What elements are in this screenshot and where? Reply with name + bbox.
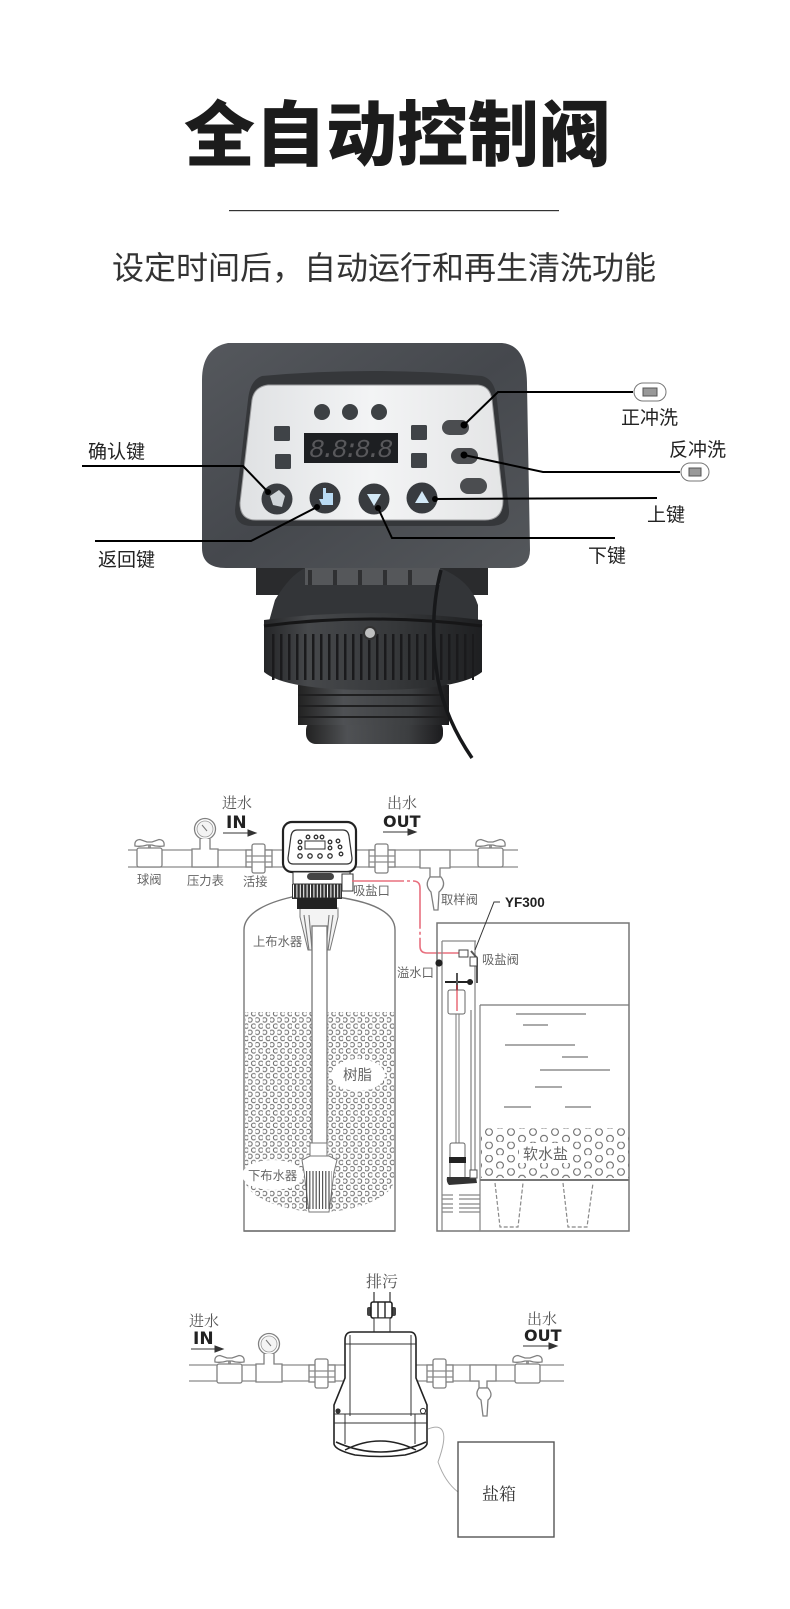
YF300 leader [475,902,500,950]
labels [189,1273,562,1504]
callout: back key [95,504,320,571]
water level [480,1004,629,1006]
round key: up [406,482,438,514]
valve threaded outlet [298,685,449,744]
brine tube [428,1427,458,1492]
icon: ball valve right [513,1356,542,1383]
control panel [240,385,503,520]
callout: up key [432,496,685,526]
diagram: side-mount valve with salt box [189,1273,564,1537]
check valve [447,1143,477,1185]
subtitle: 设定时间后，自动运行和再生清洗功能 [112,250,656,286]
labels: pipe fittings [137,873,545,980]
brine tank outline [437,923,629,1231]
labels: inlet and outlet: OUT [383,812,421,831]
salt platform [480,1179,629,1181]
valve knurled ring [264,613,482,690]
icon: union left [309,1359,335,1388]
labels: pipe fittings: 吸盐口 [353,884,390,898]
labels: OUT [524,1326,562,1345]
callout: confirm key [82,441,271,495]
arrow: out [523,1343,557,1349]
LED display: 8.8:8.8 [309,435,393,465]
label: lower distributor [242,1160,304,1190]
callout: forward wash: 正冲洗 [621,407,678,429]
labels: 盐箱 [482,1485,516,1504]
icon: tee [470,1365,496,1388]
salt box [458,1442,554,1537]
callout: confirm key: 确认键 [88,441,145,463]
upper distributor fins [304,915,333,950]
salt layer [481,1128,629,1178]
labels: inlet and outlet: 进水 [222,795,252,812]
labels: inlet and outlet: IN [226,813,247,833]
label: resin [331,1059,385,1091]
labels: pipe fittings: 吸盐阀 [482,953,519,967]
valve housing [202,343,530,568]
valve body [334,1332,427,1456]
labels: pipe fittings: 取样阀 [441,892,478,907]
valve collar [292,872,353,909]
upper distributor [300,908,338,950]
labels: pipe fittings: 压力表 [187,874,224,888]
brine line [352,881,463,953]
title: 全自动控制阀 [184,79,610,181]
arrow: in [191,1346,223,1352]
callout: up key: 上键 [647,504,685,526]
label: lower distributor: 下布水器 [248,1169,297,1183]
arrow: in [223,830,256,836]
callout: back key: 返回键 [98,549,155,571]
labels: pipe fittings: 活接 [243,874,268,889]
float [448,985,465,1150]
valve lower neck [256,565,488,625]
callout: down key [375,505,626,567]
icon: inlet union [246,844,272,873]
callout: back wash: 反冲洗 [669,439,726,461]
labels: pipe fittings: 上布水器 [253,935,302,949]
labels: inlet and outlet [222,795,421,833]
labels: inlet and outlet: 出水 [387,795,417,812]
callout: down key: 下键 [588,545,626,567]
icon: pressure gauge [256,1334,282,1382]
funnels [495,1183,593,1227]
icon: pressure gauge [192,818,218,867]
label: resin: 树脂 [343,1067,372,1084]
callout: forward wash [460,383,678,429]
float well [442,941,480,1231]
labels: pipe fittings: 溢水口 [397,966,434,980]
labels: pipe fittings: YF300 [505,895,545,910]
control head [283,822,356,872]
water ripples [504,1014,610,1107]
labels: 排污 [366,1273,398,1291]
center tube [312,926,327,1144]
icon: outlet ball valve [476,840,505,867]
icon: inlet ball valve [135,840,164,867]
tank [244,897,395,1231]
label: softener salt: 软水盐 [523,1146,568,1163]
round key: back [310,482,340,514]
recess around panel [235,371,509,526]
labels: 进水 [189,1313,219,1330]
indicator dots [314,404,387,420]
icon: sampling valve [427,877,444,910]
labels: 出水 [527,1311,557,1328]
icon: outlet union [369,844,395,873]
tank base line [244,1230,395,1232]
square keys [274,425,427,469]
callout: back wash [460,439,726,481]
icon: sampling valve [477,1388,491,1416]
resin bed [245,1012,394,1212]
power cable [434,570,472,758]
labels: pipe fittings: 球阀 [137,873,162,887]
arrow: out [383,829,416,835]
pipe lines [189,1365,564,1381]
labels: IN [193,1329,214,1349]
icon: sampling tee [420,850,450,877]
product photo: control valve [202,343,530,758]
lower distributor [302,1143,337,1212]
round key: confirm [262,484,292,514]
drain fitting [367,1292,396,1332]
side pill keys [442,420,487,494]
round key: down [358,484,390,514]
inlet pipe [128,850,518,867]
brine valve assembly [435,950,477,990]
diagram: softener system with brine tank [128,795,629,1231]
well vents [442,1195,480,1212]
icon: union right [427,1359,453,1388]
icon: ball valve left [215,1356,244,1383]
title divider [229,210,559,211]
